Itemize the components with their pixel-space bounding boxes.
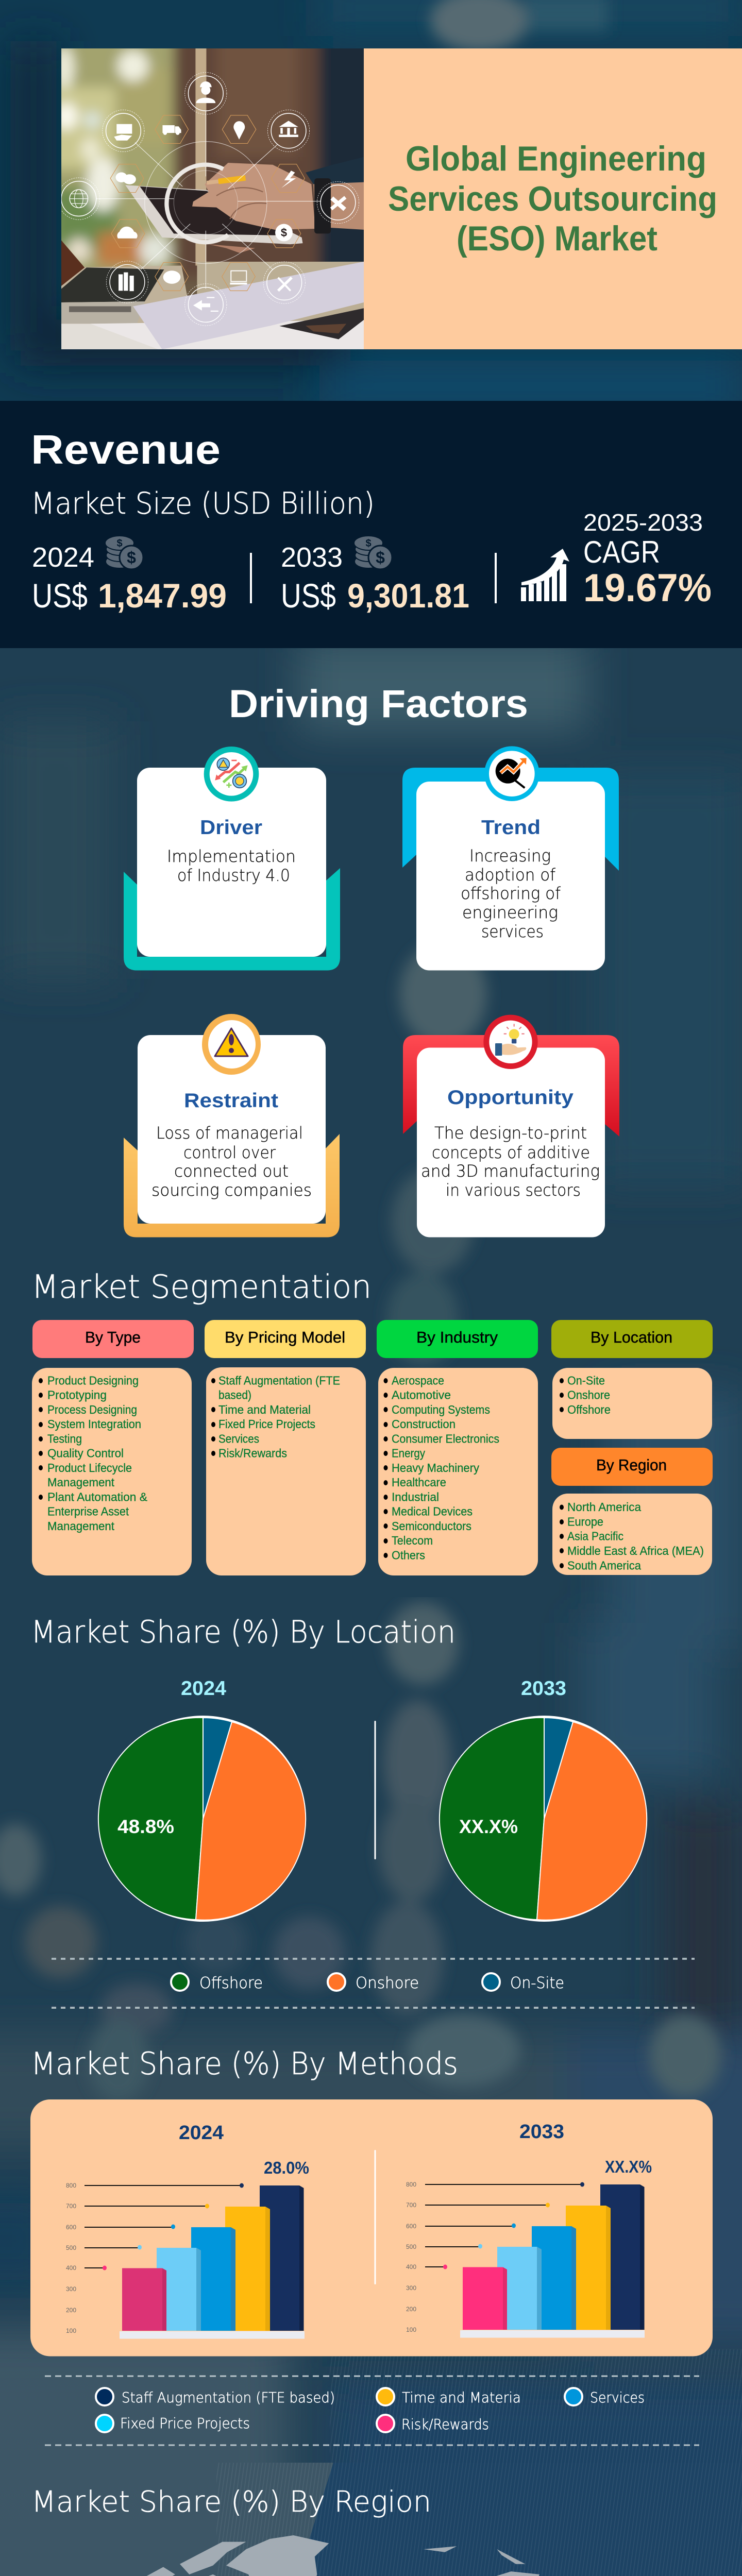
- pie chart: 2024: 2024: [181, 1677, 226, 1700]
- text: opportunity body: concepts of additive: [432, 1143, 590, 1162]
- title panel: [364, 48, 742, 349]
- list: type items: Testing: [47, 1432, 82, 1446]
- text: trend body: Increasing: [469, 846, 551, 866]
- list: location items: Offshore: [567, 1403, 611, 1416]
- background: revenue band: [0, 401, 742, 649]
- icon: restraint: [202, 1014, 261, 1075]
- bar chart: 2024: 100: [66, 2327, 76, 2334]
- bar chart: 2024: 2024: [179, 2122, 224, 2144]
- list: industry items: Consumer Electronics: [392, 1432, 499, 1446]
- text: driver body: [167, 846, 296, 885]
- list: industry items: Medical Devices: [392, 1505, 473, 1518]
- section: market share by methods: [0, 2040, 742, 2463]
- icon: growth chart arrow: [521, 549, 569, 601]
- legend: methods: Services: [590, 2389, 645, 2406]
- text: trend body: engineering: [462, 903, 558, 922]
- list: pricing items: Time and Material: [218, 1403, 311, 1416]
- bar chart: 2033: 800: [406, 2181, 416, 2188]
- stat: CAGR: CAGR: [583, 535, 660, 569]
- bar chart: 2033: 300: [406, 2284, 416, 2292]
- panel: methods charts: [30, 2099, 713, 2357]
- section: market share by region: [0, 2463, 742, 2576]
- pie chart: 2033: XX.X%: [459, 1816, 518, 1837]
- panel: by location: [551, 1320, 713, 1439]
- title heading: Global Engineering: [406, 139, 706, 178]
- list: region items: Europe: [567, 1515, 603, 1529]
- panel: trend: [402, 746, 619, 971]
- list: type items: [39, 1374, 147, 1533]
- hub lines: [96, 110, 321, 289]
- pie chart: 2024: 48.8%: [117, 1816, 174, 1837]
- bar chart: 2033: 100: [406, 2326, 416, 2333]
- text: opportunity body: and 3D manufacturing: [421, 1161, 600, 1181]
- section: market segmentation: [31, 1262, 742, 1597]
- legend: methods: Risk/Rewards: [401, 2416, 489, 2433]
- heading: driving factors: Driving Factors: [229, 682, 528, 726]
- bar chart: 2024: 28.0%: [264, 2158, 309, 2177]
- list: type items: Plant Automation &: [47, 1490, 147, 1503]
- list: type items: Quality Control: [47, 1447, 124, 1460]
- title heading: Services Outsourcing: [388, 179, 717, 218]
- text: restraint body: control over: [183, 1143, 276, 1162]
- legend: location: Offshore: [199, 1974, 263, 1992]
- legend: location: [171, 1973, 564, 1992]
- icon: coins 2033: [354, 536, 392, 569]
- icon: coins 2033: $: [376, 548, 385, 567]
- list: industry items: Industrial: [392, 1490, 439, 1503]
- list: industry items: Heavy Machinery: [392, 1461, 479, 1475]
- list: type items: Product Designing: [47, 1374, 139, 1387]
- panel: revenue: [31, 427, 712, 615]
- heading: market segmentation: Market Segmentation: [31, 1268, 372, 1306]
- icon: coins 2024: $: [116, 538, 123, 549]
- list: type items: Prototyping: [47, 1388, 107, 1402]
- list: type items: Process Designing: [47, 1403, 137, 1416]
- list: region items: Middle East & Africa (MEA): [567, 1544, 704, 1557]
- text: restraint body: connected out: [174, 1161, 289, 1181]
- bar chart: 2024: 500: [66, 2244, 76, 2251]
- stat: CAGR: 2025-2033: [583, 509, 703, 536]
- text: trend body: adoption of: [465, 865, 556, 885]
- section: driving factors: [4, 648, 721, 1262]
- legend: location: On-Site: [510, 1974, 564, 1992]
- icon: opportunity: [483, 1015, 538, 1069]
- list: type items: Management: [47, 1476, 115, 1489]
- list: industry items: Semiconductors: [392, 1519, 471, 1533]
- list: type items: Management: [47, 1519, 115, 1533]
- heading: market share by methods: Market Share (%) By Methods: [31, 2046, 458, 2082]
- text: trend body: offshoring of: [461, 884, 561, 903]
- divider: [250, 553, 252, 603]
- list: pricing items: Services: [218, 1432, 259, 1446]
- text: trend body: [461, 846, 561, 941]
- heading: market share by region: Market Share (%) By Region: [31, 2485, 431, 2519]
- bar chart: 2024: 800: [66, 2182, 76, 2189]
- pie chart: 2033: 2033: [521, 1677, 566, 1700]
- list: pricing items: Staff Augmentation (FTE: [218, 1374, 340, 1387]
- bar chart: 2024: 200: [66, 2307, 76, 2314]
- panel: by pricing model: [205, 1320, 366, 1575]
- list: industry items: Construction: [392, 1417, 456, 1431]
- legend: location: Onshore: [356, 1974, 419, 1992]
- section: market share by location: [0, 1597, 742, 2040]
- text: opportunity body: The design-to-print: [434, 1123, 587, 1143]
- list: region items: North America: [567, 1500, 641, 1514]
- panel: by pricing model: By Pricing Model: [225, 1328, 345, 1346]
- panel: by industry: [377, 1320, 538, 1575]
- text: restraint body: sourcing companies: [151, 1180, 312, 1200]
- circle icons: [61, 76, 356, 322]
- divider: [374, 1721, 376, 1859]
- text: restraint body: Loss of managerial: [156, 1123, 303, 1143]
- text: driver body: of Industry 4.0: [177, 866, 290, 885]
- icon: coins 2024: $: [127, 548, 136, 567]
- list: industry items: Telecom: [392, 1534, 433, 1547]
- background: top banner: [0, 0, 742, 412]
- bar chart: 2033: 200: [406, 2306, 416, 2313]
- list: industry items: [383, 1374, 499, 1562]
- stat: 2024: US$: [32, 577, 88, 615]
- panel: by location: By Location: [591, 1328, 672, 1346]
- bar chart: 2033: XX.X%: [605, 2157, 652, 2176]
- stat: 2024: 2024: [32, 542, 94, 573]
- list: location items: On-Site: [567, 1374, 605, 1387]
- bar chart: 2024: 300: [66, 2285, 76, 2293]
- legend: methods: Staff Augmentation (FTE based): [122, 2389, 335, 2406]
- heading: market share by location: Market Share (%) By Location: [31, 1614, 456, 1650]
- icon: driver: [204, 747, 259, 802]
- legend: methods: Fixed Price Projects: [120, 2415, 250, 2432]
- list: pricing items: Risk/Rewards: [218, 1447, 287, 1460]
- bar chart: 2033: 700: [406, 2201, 416, 2209]
- section: banner and revenue: [0, 0, 742, 648]
- text: market size: Market Size (USD Billion): [31, 486, 375, 521]
- panel: by industry: By Industry: [416, 1328, 498, 1346]
- text: restraint body: [151, 1123, 312, 1200]
- legend: methods: [96, 2388, 645, 2433]
- list: pricing items: Fixed Price Projects: [218, 1417, 315, 1431]
- list: industry items: Healthcare: [392, 1476, 446, 1489]
- bar chart: 2024: 700: [66, 2202, 76, 2210]
- text: trend body: services: [481, 922, 544, 941]
- heading: revenue: Revenue: [31, 427, 221, 472]
- panel: restraint: [124, 1014, 340, 1238]
- bar chart: 2033: 2033: [519, 2121, 564, 2143]
- bar chart: 2033: [406, 2121, 652, 2338]
- panel: by region: By Region: [596, 1456, 667, 1474]
- stat: 2033: US$: [281, 577, 336, 615]
- world map: [71, 2535, 667, 2576]
- icon: trend: [484, 746, 539, 801]
- list: industry items: Energy: [392, 1447, 425, 1460]
- list: industry items: Aerospace: [392, 1374, 444, 1387]
- divider: [495, 553, 497, 603]
- text: opportunity body: [421, 1123, 600, 1200]
- hero photo: [61, 48, 364, 349]
- panel: driver: [124, 747, 340, 971]
- stat: 2033: [281, 542, 469, 615]
- title heading: (ESO) Market: [457, 219, 657, 258]
- panel: by type: By Type: [85, 1328, 141, 1346]
- heading: driver: Driver: [200, 817, 262, 839]
- panel: opportunity: [403, 1015, 619, 1238]
- list: type items: Product Lifecycle: [47, 1461, 132, 1475]
- panel: by region: [551, 1448, 713, 1575]
- bar chart: 2033: 400: [406, 2263, 416, 2270]
- pie chart: 2033: [440, 1677, 647, 1922]
- text: opportunity body: in various sectors: [446, 1180, 581, 1200]
- hexagons: [110, 115, 305, 291]
- pie chart: 2024: [98, 1677, 306, 1922]
- heading: opportunity: Opportunity: [447, 1087, 574, 1109]
- stat: 2024: 1,847.99: [98, 577, 227, 615]
- list: location items: Onshore: [567, 1388, 610, 1402]
- bar chart: 2024: [66, 2122, 309, 2339]
- legend: methods: Time and Materia: [402, 2389, 521, 2406]
- list: region items: [560, 1500, 704, 1572]
- stat: CAGR: [583, 509, 712, 610]
- bar chart: 2024: 400: [66, 2264, 76, 2272]
- hero photo: $: [281, 226, 287, 239]
- heading: restraint: Restraint: [184, 1090, 278, 1112]
- list: industry items: Automotive: [392, 1388, 451, 1402]
- list: region items: South America: [567, 1558, 641, 1572]
- bar chart: 2024: 600: [66, 2224, 76, 2231]
- title heading: [388, 139, 717, 258]
- stat: 2033: 2033: [281, 542, 343, 573]
- stat: 2033: 9,301.81: [347, 577, 469, 615]
- icon: coins 2024: [105, 536, 143, 569]
- panel: by type: [32, 1320, 194, 1575]
- stat: CAGR: 19.67%: [583, 566, 712, 610]
- list: pricing items: [211, 1374, 340, 1460]
- list: type items: System Integration: [47, 1417, 141, 1431]
- stat: 2024: [32, 542, 227, 615]
- list: region items: Asia Pacific: [567, 1530, 623, 1543]
- heading: trend: Trend: [481, 817, 541, 839]
- list: industry items: Computing Systems: [392, 1403, 490, 1416]
- bar chart: 2033: 500: [406, 2243, 416, 2250]
- icon: coins 2033: $: [365, 538, 372, 549]
- text: driver body: Implementation: [167, 846, 296, 866]
- list: industry items: Others: [392, 1549, 425, 1562]
- bar chart: 2033: 600: [406, 2223, 416, 2230]
- list: pricing items: based): [218, 1388, 251, 1402]
- divider: [374, 2150, 376, 2284]
- list: location items: [560, 1374, 611, 1416]
- list: type items: Enterprise Asset: [47, 1505, 129, 1518]
